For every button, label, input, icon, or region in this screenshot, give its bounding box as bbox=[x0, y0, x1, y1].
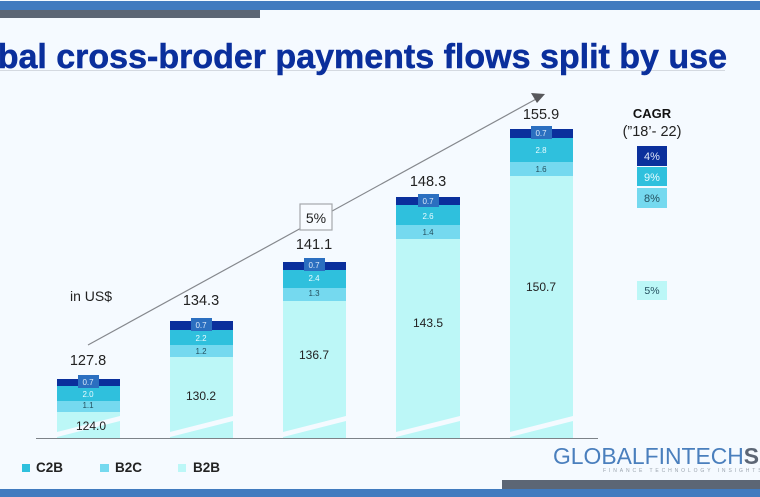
logo: GLOBALFINTECHSI bbox=[553, 443, 760, 469]
CAGR boxes: 8% bbox=[644, 193, 660, 205]
legend: B2B bbox=[193, 460, 220, 475]
CAGR boxes bbox=[637, 146, 667, 300]
bar: 148.3: 143.5 bbox=[413, 316, 443, 330]
arrow: growth trend bbox=[88, 93, 545, 345]
bar: 134.3: 2.2 bbox=[195, 334, 207, 343]
bar: 141.1: 0.7 bbox=[308, 261, 320, 270]
CAGR boxes: 5% bbox=[644, 285, 660, 297]
CAGR heading bbox=[623, 106, 681, 140]
bar: 141.1: 1.3 bbox=[308, 289, 320, 298]
bar: 127.8: 0.7 bbox=[82, 378, 94, 387]
bar: 127.8: 124.0 bbox=[76, 419, 106, 433]
CAGR heading: CAGR bbox=[633, 106, 672, 121]
legend bbox=[22, 460, 220, 475]
bar: 127.8: 127.8 bbox=[70, 353, 106, 369]
bar: 155.9: 1.6 bbox=[535, 165, 547, 174]
chart baseline bbox=[36, 438, 598, 440]
bar: 134.3: 130.2 bbox=[186, 389, 216, 403]
bar: 134.3: 134.3 bbox=[183, 293, 219, 309]
bar: 134.3 bbox=[170, 293, 233, 438]
legend: B2C bbox=[115, 460, 142, 475]
bar: 148.3: 148.3 bbox=[410, 174, 446, 190]
callout: 5% growth: 5% bbox=[306, 210, 326, 226]
bar: 127.8 bbox=[57, 353, 120, 438]
bar: 141.1: 141.1 bbox=[296, 237, 332, 253]
bottom banner bbox=[0, 480, 760, 497]
unit label: in US$ bbox=[70, 288, 112, 304]
top banner bbox=[0, 1, 760, 18]
bar: 134.3: 1.2 bbox=[195, 347, 207, 356]
bar: 127.8: 1.1 bbox=[82, 401, 94, 410]
CAGR heading: (”18’- 22) bbox=[623, 124, 681, 140]
logo: FINANCE TECHNOLOGY INSIGHTS bbox=[603, 468, 760, 474]
bar: 155.9: 150.7 bbox=[526, 280, 556, 294]
bar: 148.3: 0.7 bbox=[422, 197, 434, 206]
bar: 134.3: 0.7 bbox=[195, 321, 207, 330]
bar: 127.8: 2.0 bbox=[82, 390, 94, 399]
callout: 5% growth bbox=[300, 204, 332, 230]
bar: 148.3 bbox=[396, 174, 460, 438]
bar: 155.9: 155.9 bbox=[523, 107, 559, 123]
CAGR boxes: 4% bbox=[644, 151, 660, 163]
bar: 148.3: 2.6 bbox=[422, 212, 434, 221]
bar: 148.3: 1.4 bbox=[422, 228, 434, 237]
CAGR boxes: 9% bbox=[644, 172, 660, 184]
bar: 141.1 bbox=[283, 237, 346, 438]
bar: 155.9 bbox=[510, 107, 573, 438]
bar: 155.9: 2.8 bbox=[535, 146, 547, 155]
bar: 141.1: 136.7 bbox=[299, 348, 329, 362]
bar: 141.1: 2.4 bbox=[308, 274, 320, 283]
legend: C2B bbox=[36, 460, 63, 475]
bar: 155.9: 0.7 bbox=[535, 129, 547, 138]
